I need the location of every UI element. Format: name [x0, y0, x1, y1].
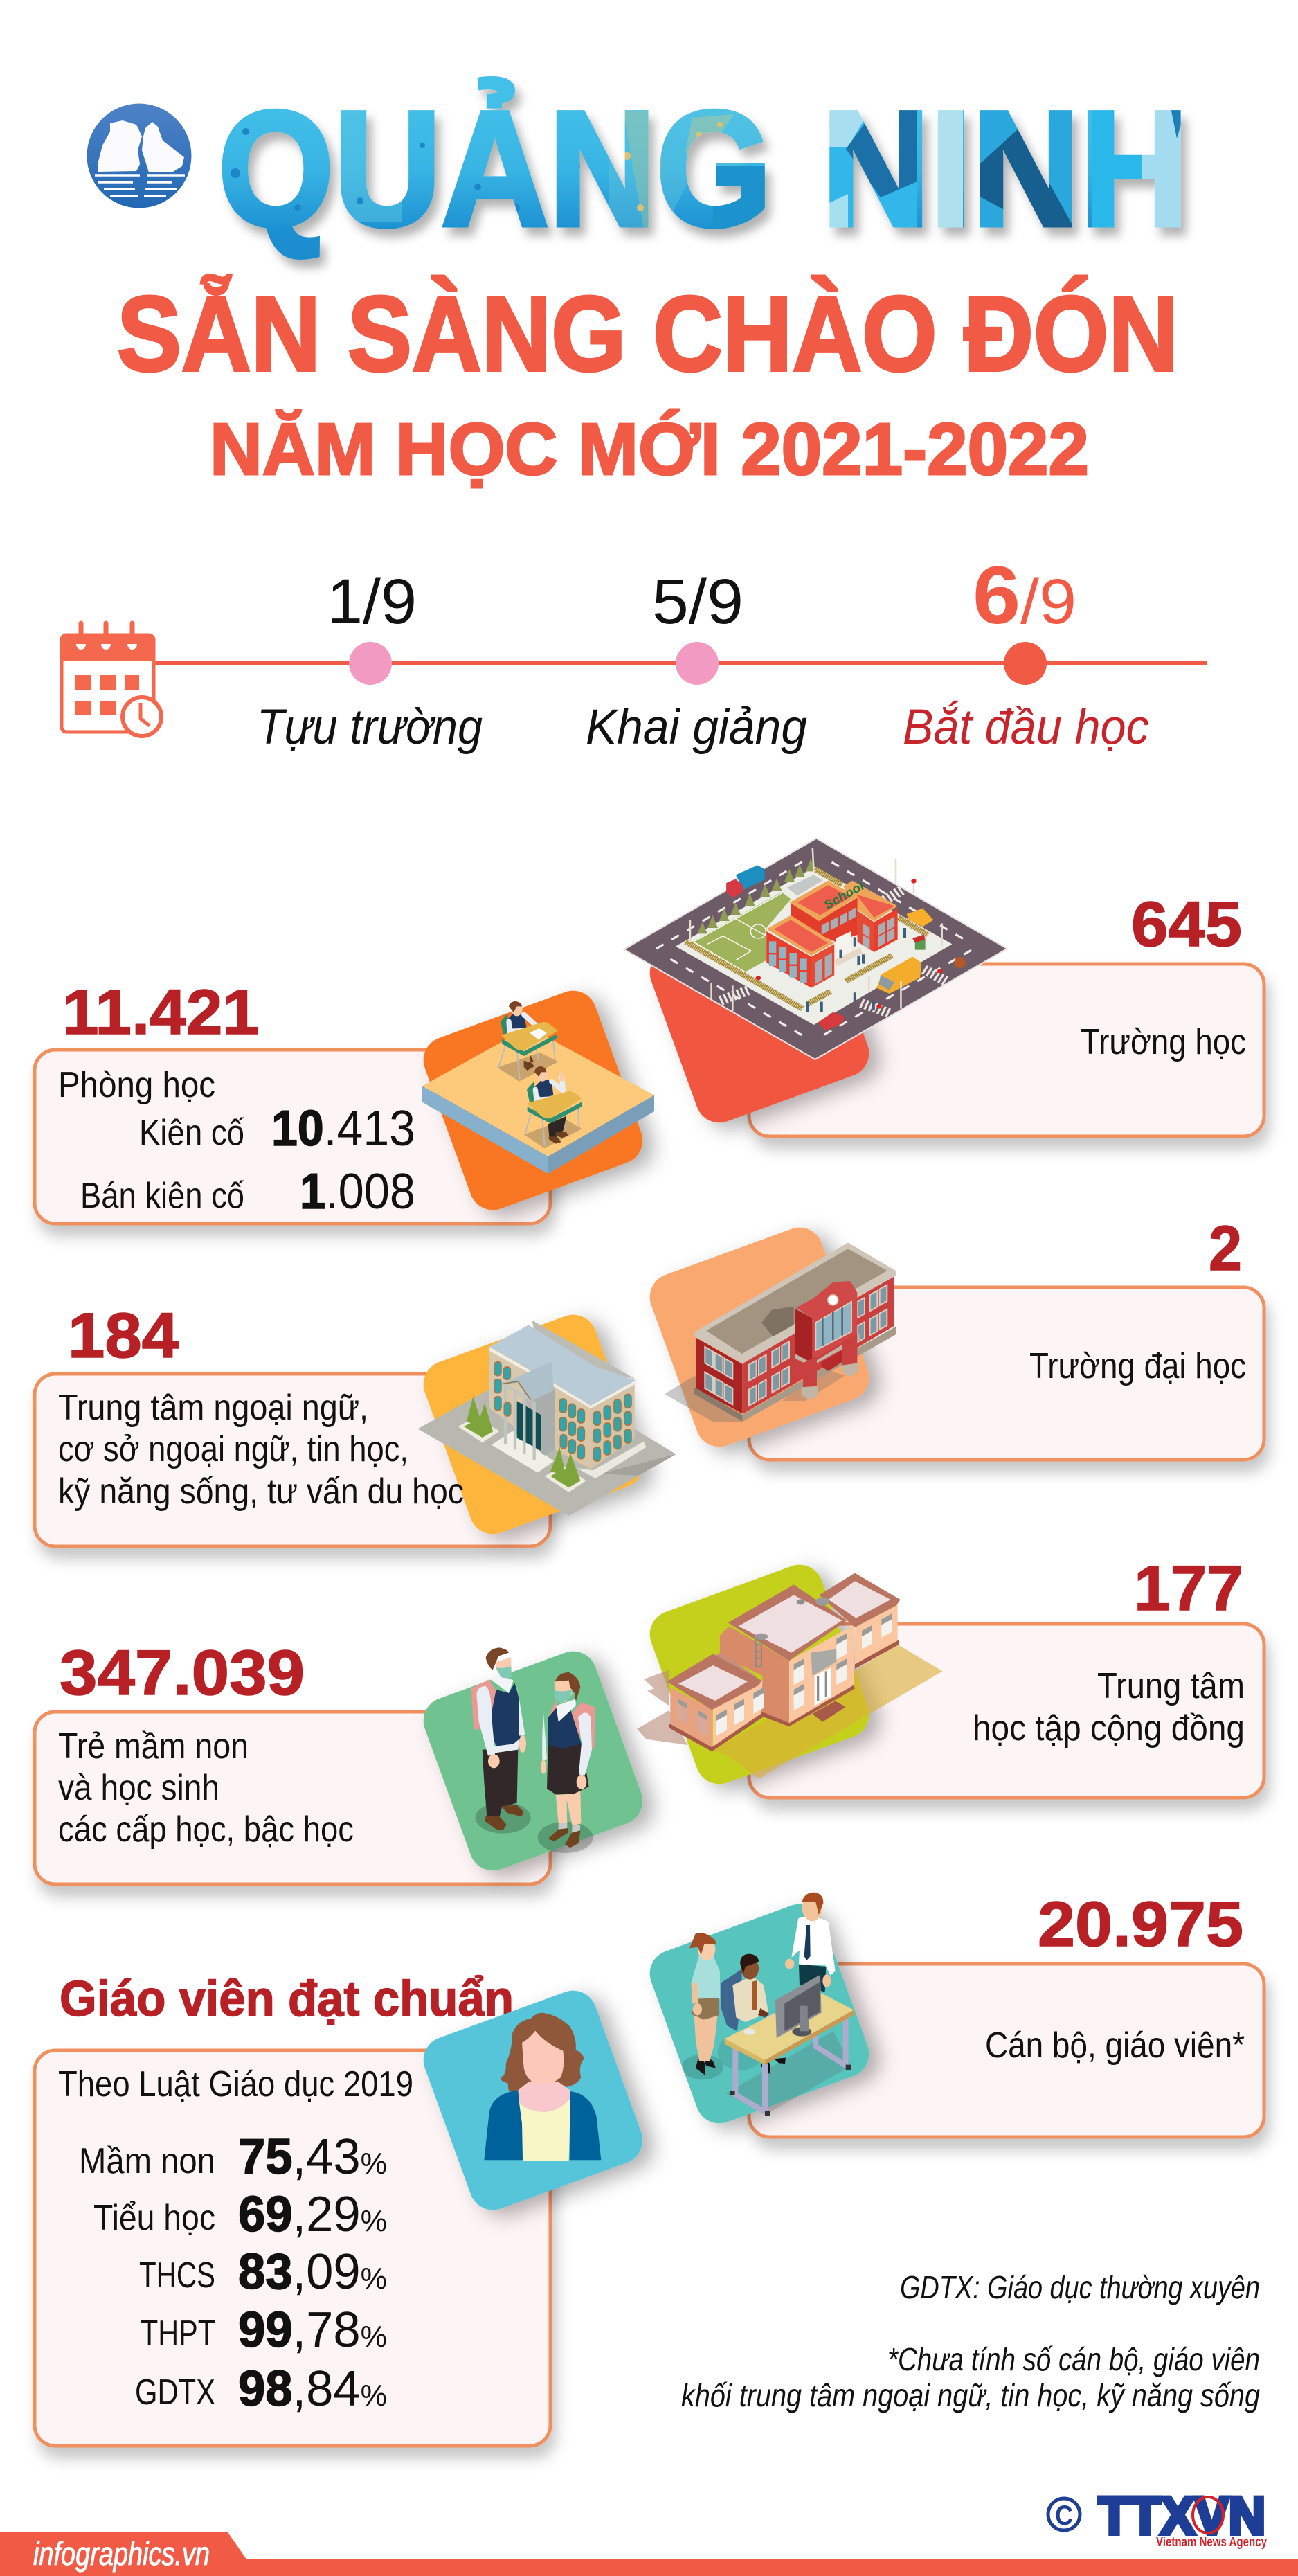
colour tile [417, 984, 649, 1217]
card [35, 1712, 550, 1884]
text block: 1.008 [300, 1164, 415, 1219]
colour tile [417, 1308, 649, 1541]
date marker 1/9 [257, 566, 483, 755]
footnotes [681, 2269, 1260, 2413]
text block: Trung tâm ngoại ngữ, [58, 1388, 368, 1428]
colour tile [417, 1645, 649, 1877]
stats list: 83,09% [238, 2244, 387, 2300]
number 347.039: 347.039 [60, 1638, 305, 1708]
footer bar [0, 2532, 1298, 2576]
number 184: 184 [68, 1300, 179, 1371]
text block: và học sinh [58, 1768, 219, 1808]
date marker 5/9: Khai giảng [586, 700, 807, 755]
colour tile [643, 1221, 876, 1454]
date marker 6/9: Bắt đầu học [903, 700, 1149, 755]
date marker 6/9 [903, 550, 1149, 755]
colour tile [643, 1558, 876, 1791]
card [35, 2050, 550, 2446]
footer tab [0, 2532, 249, 2576]
panel: universities (2) [643, 1213, 1264, 1460]
stats list [79, 2129, 387, 2417]
number 20.975: 20.975 [1038, 1889, 1243, 1960]
panel: standard teachers [35, 1971, 649, 2446]
text block: các cấp học, bậc học [58, 1809, 354, 1850]
text block [973, 1666, 1245, 1748]
label: Trường đại học [1029, 1346, 1246, 1386]
label: Trường học [1081, 1022, 1246, 1062]
text block: cơ sở ngoại ngữ, tin học, [58, 1429, 408, 1469]
timeline line [149, 661, 1207, 665]
heading: san sang chao don: SẴN SÀNG CHÀO ĐÓN [117, 274, 1178, 393]
illustration: school campus [624, 839, 1007, 1059]
card [35, 1374, 550, 1546]
illustration: community centre [637, 1573, 943, 1778]
stats list: 75,43% [238, 2129, 387, 2185]
panel: schools (645) [624, 839, 1264, 1136]
colour tile [643, 897, 876, 1129]
text block: 10.413 [271, 1101, 415, 1156]
subtitle: Theo Luật Giáo dục 2019 [58, 2064, 413, 2104]
timeline [62, 550, 1207, 755]
text block: kỹ năng sống, tư vấn du học [58, 1472, 464, 1512]
card [749, 1287, 1264, 1460]
text block [58, 1726, 354, 1850]
stats list: THPT [141, 2314, 215, 2354]
text block [58, 1388, 464, 1512]
colour tile [417, 1984, 649, 2217]
text block: học tập cộng đồng [973, 1708, 1245, 1748]
card [35, 1050, 550, 1224]
text block [58, 1065, 415, 1219]
date marker 6/9: 6/9 [973, 550, 1076, 641]
TTXVN logo: TTXVN [1099, 2487, 1265, 2546]
stats list: 98,84% [238, 2361, 387, 2417]
panel: community learning centres (177) [637, 1553, 1264, 1798]
date marker 5/9 [586, 566, 807, 755]
panel: classrooms (11.421) [35, 977, 654, 1224]
illustration: university building [665, 1242, 896, 1422]
illustration: masked students [471, 1647, 595, 1853]
title: Quang Ninh: NINH [822, 78, 1189, 260]
illustration: school campus: School [821, 879, 867, 912]
text block: Trung tâm [1097, 1666, 1245, 1706]
text block: Bán kiên cố [80, 1176, 244, 1216]
text block: Kiên cố [139, 1113, 244, 1153]
illustration: staff at a desk [682, 1893, 854, 2116]
colour tile [643, 1897, 876, 2130]
number 11.421: 11.421 [62, 977, 259, 1048]
illustration: students at desks [422, 1001, 654, 1174]
text block: Phòng học [58, 1065, 215, 1105]
stats list: THCS [139, 2255, 215, 2296]
card [749, 1624, 1264, 1798]
date marker 1/9: Tựu trường [257, 700, 483, 755]
date marker 5/9: 5/9 [652, 566, 743, 637]
panel: students (347.039) [35, 1638, 649, 1884]
stats list: 69,29% [238, 2187, 387, 2242]
title: Quang Ninh [218, 78, 1189, 260]
header logo: Quang Ninh [87, 104, 191, 208]
text block: Trẻ mầm non [58, 1726, 249, 1766]
card [749, 1964, 1264, 2137]
stats list: Tiểu học [93, 2198, 215, 2238]
icon: calendar [62, 623, 161, 736]
label: Cán bộ, giáo viên* [985, 2025, 1245, 2066]
footer source: infographics.vn [33, 2535, 210, 2572]
TTXVN logo: C [1055, 2501, 1073, 2531]
TTXVN logo: Vietnam News Agency [1156, 2535, 1267, 2550]
panel: staff (20.975) [643, 1889, 1264, 2137]
heading: nam hoc moi: NĂM HỌC MỚI 2021-2022 [210, 409, 1089, 490]
stats list: GDTX [135, 2372, 215, 2413]
date marker 1/9: 1/9 [327, 566, 417, 637]
stats list: Mầm non [79, 2141, 215, 2181]
icon: teacher bust [484, 2013, 601, 2161]
illustration: language centre [417, 1321, 676, 1516]
number 645: 645 [1131, 889, 1242, 960]
title: Quang Ninh: QUẢNG [218, 78, 772, 260]
number 177: 177 [1134, 1553, 1243, 1624]
number 2: 2 [1209, 1213, 1242, 1284]
panel: language centres (184) [35, 1300, 676, 1546]
stats list: 99,78% [238, 2302, 387, 2358]
card [749, 964, 1264, 1136]
heading: Giáo viên đạt chuẩn [60, 1971, 514, 2027]
